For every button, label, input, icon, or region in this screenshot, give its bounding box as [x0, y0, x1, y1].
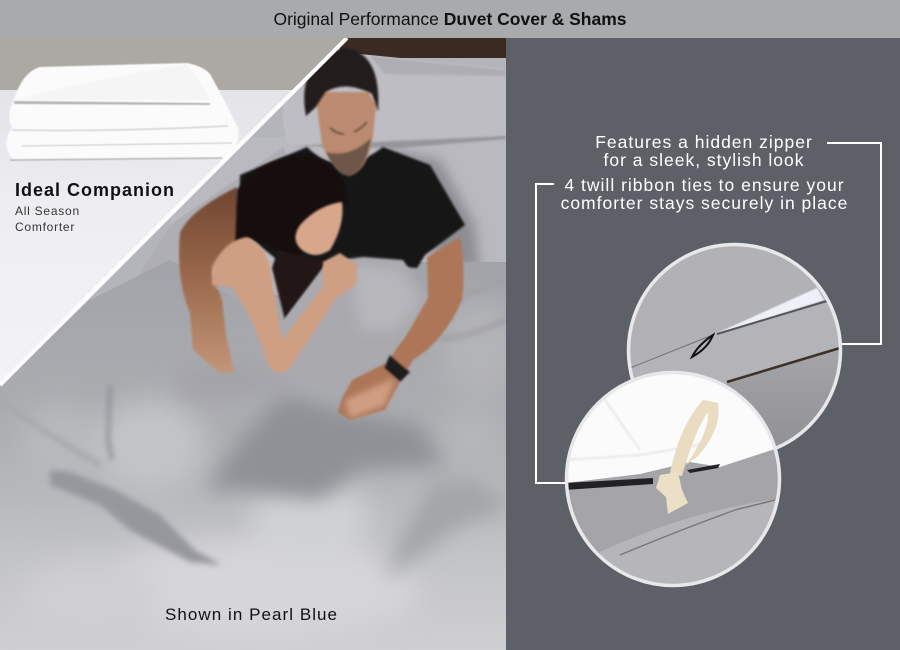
shadow under woman's face: [272, 250, 330, 320]
ribbon loop: [670, 400, 719, 476]
zipper seam: [630, 334, 715, 368]
pillows and sheet: [283, 54, 506, 262]
fold line: [727, 348, 840, 382]
text: twill ribbon feature: 4 twill ribbon ties to ensure your: [564, 175, 845, 195]
text: twill ribbon feature: comforter stays securely in place: [561, 193, 848, 213]
icon: folded comforter: [6, 63, 238, 160]
detail circle: twill ribbon tie: [564, 370, 782, 588]
panel: ideal companion triangle: [0, 38, 348, 386]
dark shadow: [565, 478, 653, 490]
zipper opening: [717, 288, 824, 334]
text: hidden zipper feature: for a sleek, stylish look: [603, 150, 805, 170]
duvet: [0, 260, 506, 650]
white comforter: [568, 374, 774, 483]
text: twill ribbon feature: [561, 175, 848, 213]
headboard: [340, 38, 506, 58]
ribbon knot and tail: [656, 472, 688, 514]
subheading: All Season: [15, 204, 80, 218]
caption: shown in pearl blue: Shown in Pearl Blue: [165, 605, 338, 624]
man: left arm and hand: [179, 187, 240, 373]
duvet top fold: [212, 256, 429, 344]
woman: hair: [235, 155, 347, 262]
man: right arm: [338, 237, 464, 420]
fabric lower lip: [625, 296, 845, 400]
header bar: [0, 0, 900, 38]
heading: Ideal Companion: [15, 180, 175, 200]
text: hidden zipper feature: [595, 132, 813, 170]
photo: couple sleeping under pearl blue duvet: [0, 38, 506, 650]
subheading: [15, 204, 80, 234]
duvet top fold highlight: [356, 268, 414, 328]
man: shirt: [240, 147, 465, 268]
stitching: [620, 500, 775, 555]
header bar: Original Performance Duvet Cover & Shams: [273, 9, 627, 29]
text: ideal companion: [15, 180, 175, 234]
woman: shoulder, arm and hand: [212, 237, 357, 373]
lower fold: [600, 499, 776, 584]
text: hidden zipper feature: Features a hidden zipper: [595, 132, 813, 152]
subheading: Comforter: [15, 220, 75, 234]
man: head and beard: [304, 48, 378, 176]
zipper pull: [692, 335, 713, 357]
duvet shading and folds: [32, 305, 506, 628]
detail circle: zipper: [626, 242, 842, 450]
connector lines: [535, 142, 882, 484]
woman: face: [295, 202, 342, 255]
